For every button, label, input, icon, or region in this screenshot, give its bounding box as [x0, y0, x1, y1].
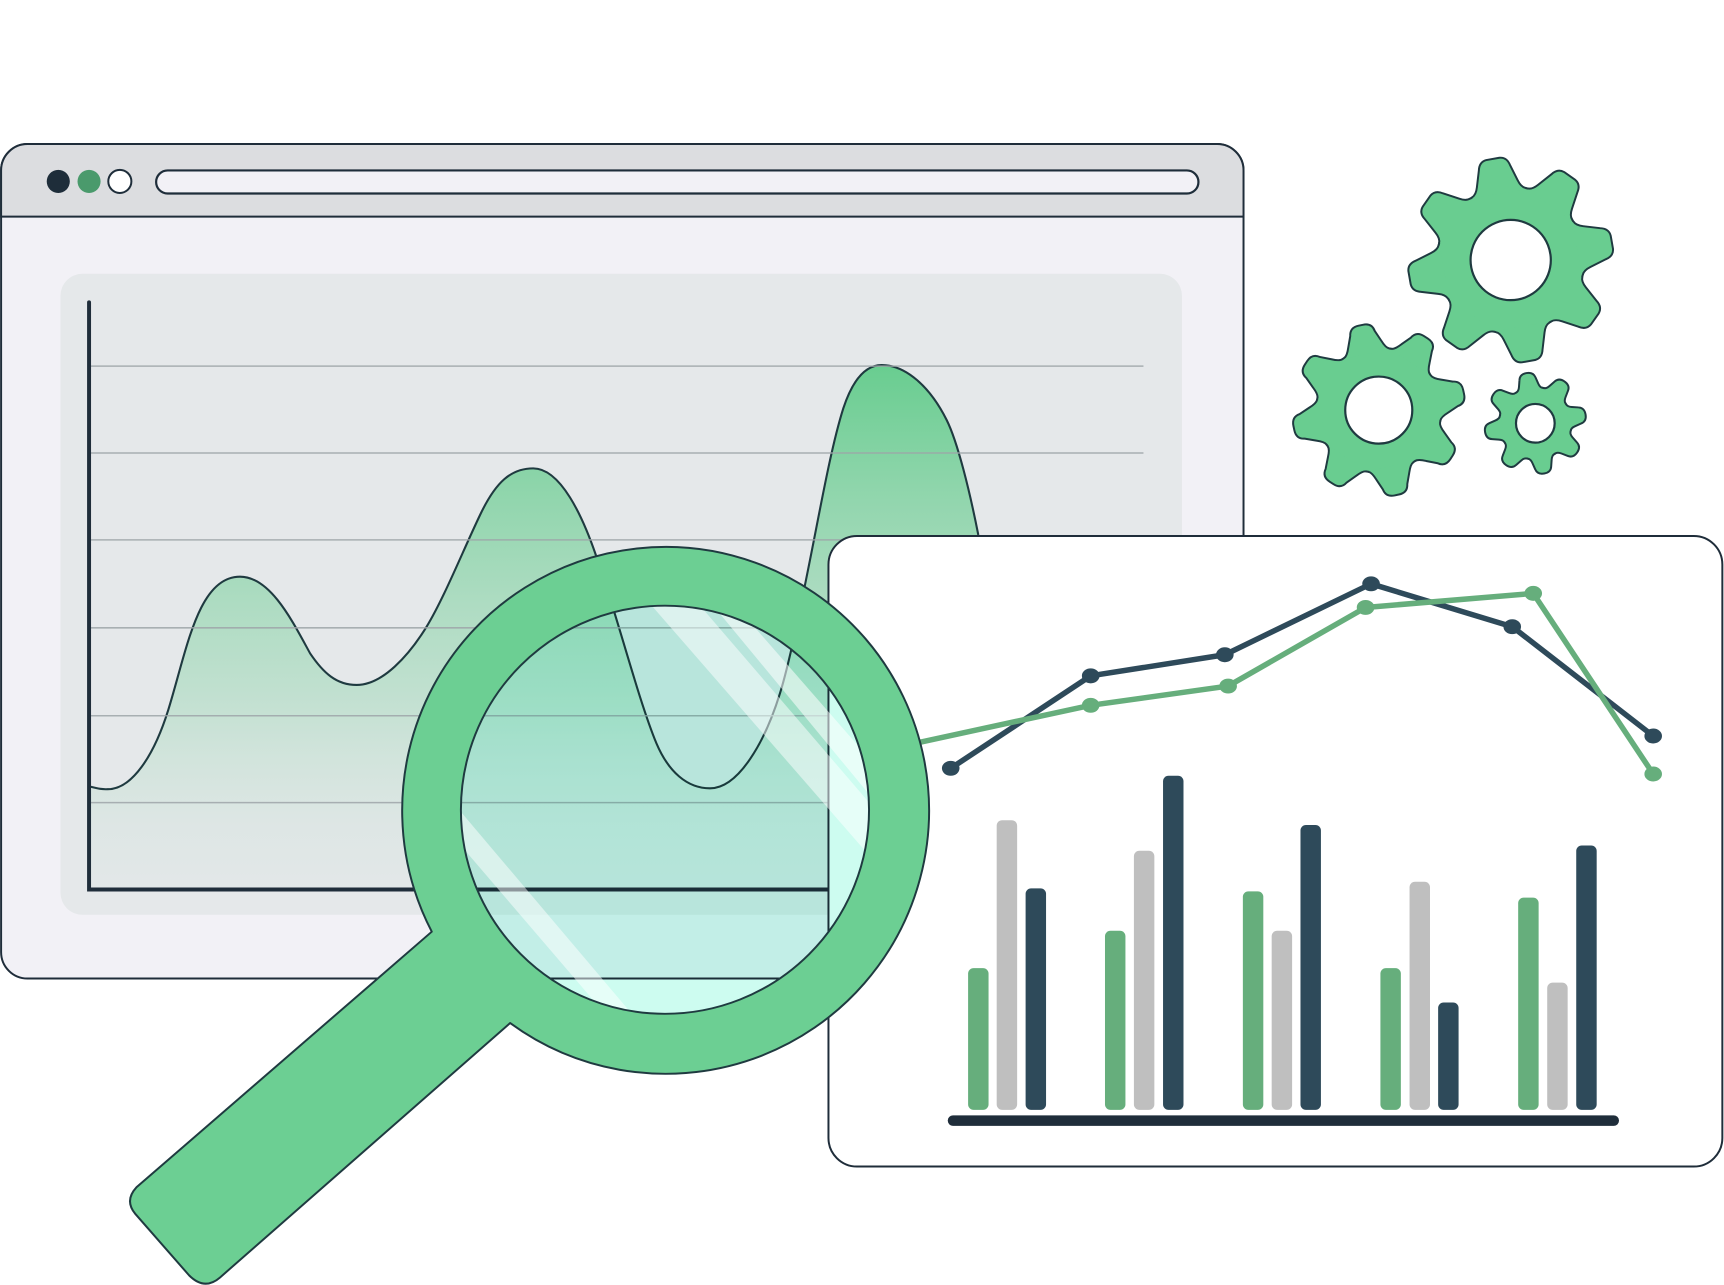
small gear: [1484, 372, 1587, 475]
window control dots: [47, 170, 131, 193]
address bar: [156, 170, 1198, 194]
window title bar: [1, 144, 1244, 217]
lens frame and handle: [130, 547, 929, 1284]
window body: [1, 144, 1244, 979]
lens tint: [461, 606, 869, 1014]
chart backdrop panel: [60, 274, 1182, 915]
browser window: [1, 144, 1244, 979]
area chart fill: [90, 365, 1143, 889]
area chart curve: [90, 365, 978, 789]
large gear: [1406, 155, 1616, 365]
magnifying glass: [130, 547, 929, 1284]
report panel: [828, 536, 1722, 1167]
medium gear: [1290, 322, 1467, 499]
chart grid lines: [90, 366, 1143, 803]
bar chart: [968, 776, 1597, 1110]
lens highlights: [460, 605, 880, 1010]
line chart: dark series: [942, 576, 1662, 776]
bar chart baseline: [948, 1115, 1619, 1126]
line chart: green series: [920, 586, 1662, 781]
panel card: [828, 536, 1722, 1167]
gears: [1290, 155, 1616, 499]
chart axes: [89, 302, 1143, 889]
